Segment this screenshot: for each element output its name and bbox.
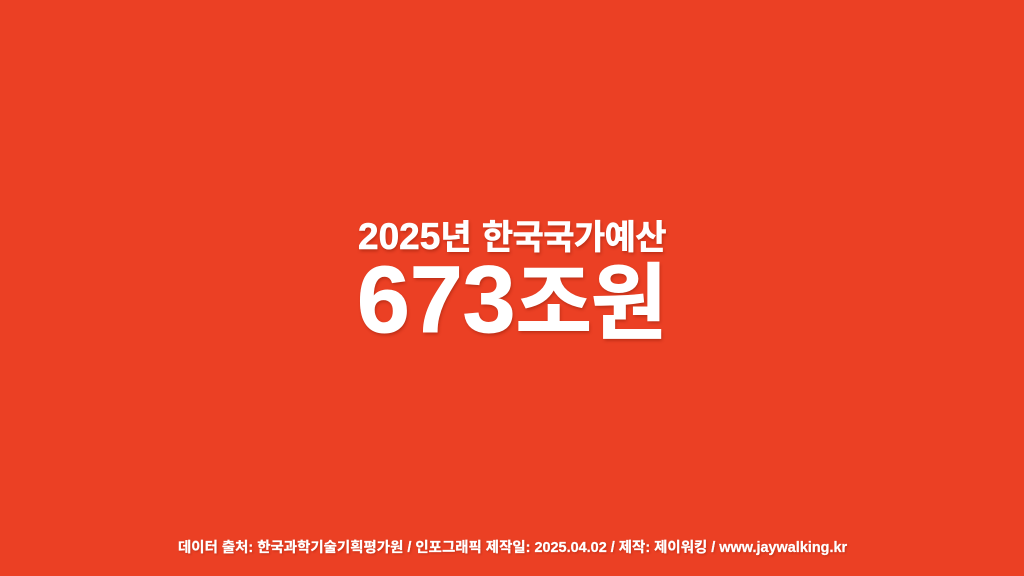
subtitle: 2025 national budget: 2025년 한국국가예산	[358, 216, 666, 257]
headline figure: 673 trillion won: 673조원	[357, 247, 666, 353]
footer: data source and credits: 데이터 출처: 한국과학기술기획평가원 / 인포그래픽 제작일: 2025.04.02 / 제작: 제이워킹 / www.jaywalking.kr	[178, 540, 847, 556]
